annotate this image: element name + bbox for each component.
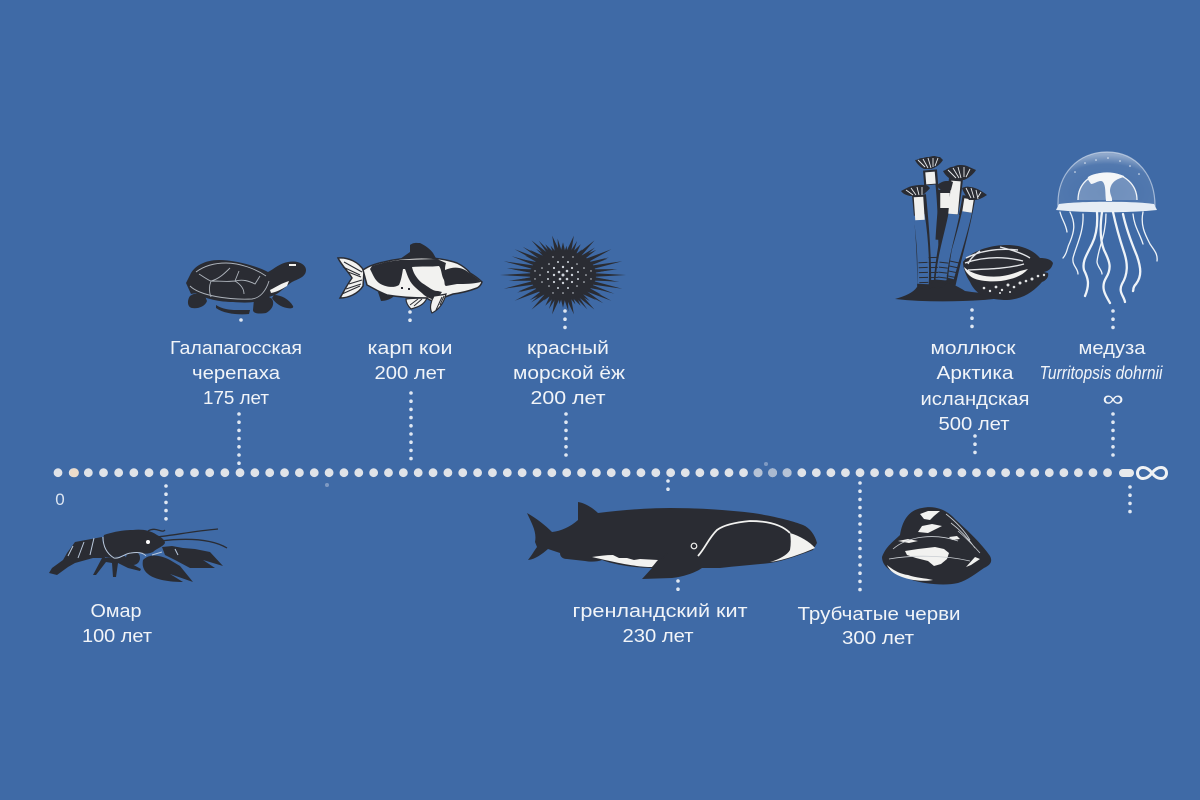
icon: Galapagos turtle (186, 260, 306, 314)
icon: bowhead whale (527, 502, 817, 579)
label: Galapagos turtle: 175 лет (203, 388, 269, 408)
label: Arctica islandica mollusc: Арктика (936, 363, 1015, 383)
axis start label: 0: 0 (55, 490, 65, 509)
label: lobster: 100 лет (82, 626, 152, 646)
icon: lobster (49, 529, 227, 582)
label: Arctica islandica mollusc (920, 338, 1030, 434)
label: Galapagos turtle: Галапагосская (170, 338, 302, 358)
axis end symbol: infinity (1138, 468, 1166, 478)
label: Arctica islandica mollusc: 500 лет (938, 414, 1010, 434)
label: red sea urchin: 200 лет (530, 388, 606, 408)
icon: tube worms (895, 156, 1018, 301)
label: koi carp: 200 лет (374, 363, 446, 383)
timeline axis (58, 462, 1134, 487)
label: jellyfish: ∞ (1102, 386, 1124, 411)
tentacles (1060, 212, 1157, 303)
label: jellyfish (1040, 338, 1163, 411)
worm fans (901, 156, 987, 200)
label: tube worms (798, 604, 960, 648)
icon: Arctica islandica mollusc (963, 245, 1053, 300)
label: Arctica islandica mollusc: исландская (920, 389, 1030, 409)
label: lobster (82, 601, 152, 646)
label: Arctica islandica mollusc: моллюск (930, 338, 1016, 358)
label: bowhead whale (572, 601, 748, 646)
label: red sea urchin: красный (527, 338, 609, 358)
icon: Turritopsis jellyfish (1056, 152, 1157, 303)
label: bowhead whale: 230 лет (622, 626, 694, 646)
label: red sea urchin (513, 338, 625, 408)
connectors: dotted leader lines (166, 310, 1130, 592)
label: jellyfish: медуза (1078, 338, 1147, 358)
label: lobster: Омар (90, 601, 142, 621)
label: bowhead whale: гренландский кит (572, 601, 748, 621)
label: tube worms: 300 лет (842, 628, 914, 648)
label: tube worms: Трубчатые черви (798, 604, 960, 624)
label: koi carp: карп кои (368, 338, 452, 358)
icon: red sea urchin (500, 233, 626, 317)
label: Galapagos turtle (170, 338, 302, 408)
label: red sea urchin: морской ёж (513, 363, 625, 383)
ground (895, 283, 1018, 301)
icon: clam shell (882, 507, 991, 584)
label: koi carp (368, 338, 452, 383)
label: jellyfish: Turritopsis dohrnii (1040, 363, 1163, 383)
icon: koi carp (338, 243, 482, 313)
worm tubes (918, 170, 969, 292)
label: Galapagos turtle: черепаха (192, 363, 281, 383)
